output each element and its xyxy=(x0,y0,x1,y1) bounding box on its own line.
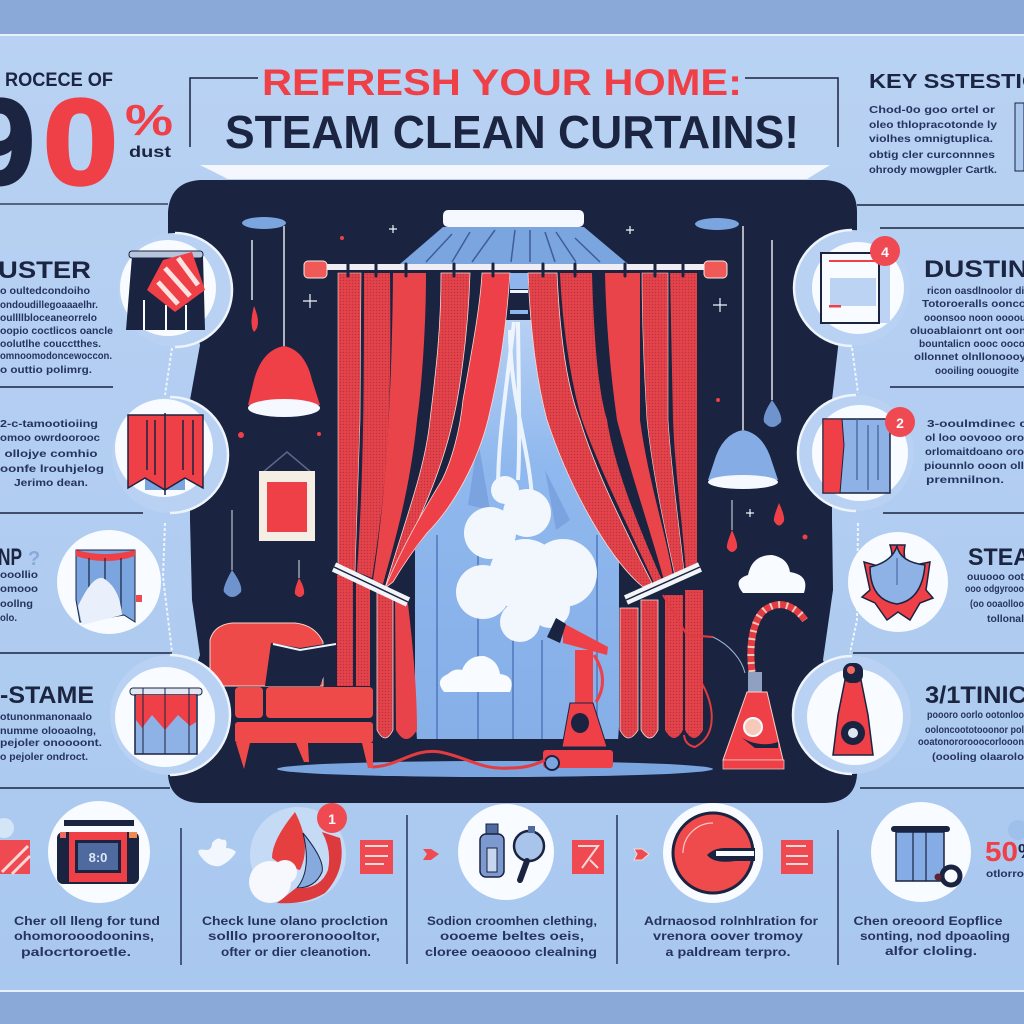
icon: red curtain panel xyxy=(112,397,228,513)
framed red picture xyxy=(259,452,315,541)
title: STEAM CLEAN CURTAINS! xyxy=(225,106,799,158)
icon: small steam puff xyxy=(198,839,236,866)
icon: document with badge 4: 4 xyxy=(881,244,889,260)
step right 3: steam xyxy=(965,544,1024,625)
step right 4 xyxy=(918,682,1024,763)
stage floor xyxy=(277,761,713,777)
step right 1: dustin: ooonsoo noon oooou xyxy=(924,313,1024,324)
step right 3: steam: tollonal xyxy=(987,614,1024,625)
icon: curtain with rail xyxy=(110,655,230,775)
bottom step 3: bottle and brush xyxy=(458,804,554,900)
handheld steamer xyxy=(543,618,613,770)
step left 3: olo. xyxy=(0,613,17,624)
key statistics block: oleo thlopracotonde ly xyxy=(869,120,998,131)
bottom text 2: Check lune olano proclction xyxy=(202,914,388,928)
bottom text 5: sonting, nod dpoaoling xyxy=(860,929,1010,943)
bottom text 5 xyxy=(854,914,1010,958)
steamer hose cord xyxy=(372,751,545,768)
step right 1: dustin: oluoablaionrt ont oon xyxy=(910,326,1024,337)
bottom step 5: curtain and ring xyxy=(871,802,971,902)
red sofa xyxy=(210,623,373,769)
bottom text 1: ohomorooodoonins, xyxy=(14,929,154,943)
bottom text 4 xyxy=(644,914,818,959)
step left 1: duster: o oultedcondoiho xyxy=(0,286,90,297)
stat: 50% xyxy=(985,820,1024,880)
key statistics block: Chod-0o goo ortel or xyxy=(869,105,995,116)
icon: curtain with badge 2 xyxy=(798,395,915,511)
step right 2: orlomaitdoano oro xyxy=(925,447,1024,458)
left red curtain xyxy=(334,273,510,740)
bottom text 1: Cher oll lleng for tund xyxy=(14,914,160,928)
step right 1: dustin: DUSTIN xyxy=(924,256,1024,283)
bottom text 4: Adrnaosod rolnhlration for xyxy=(644,914,818,928)
stat: 90% dust: ROCECE OF xyxy=(5,70,113,91)
small cloud right xyxy=(739,555,805,593)
bottom text 2 xyxy=(202,914,388,959)
arrow 1 xyxy=(423,849,439,860)
step left 4: stame: otunonmanonaalo xyxy=(0,712,92,723)
step right 4: (oooling olaarolo xyxy=(932,752,1024,763)
stat: 90% dust xyxy=(0,70,173,210)
window with sky curtains xyxy=(415,273,619,739)
bottom text 4: a paldream terpro. xyxy=(666,945,790,959)
left hanging lamp xyxy=(242,217,320,417)
step left 1: duster: o outtio polimrg. xyxy=(0,365,92,376)
icon: curtain with badge 2: 2 xyxy=(896,415,904,431)
bottom text 4: vrenora oover tromoy xyxy=(653,929,803,943)
icon: duster on rail xyxy=(118,233,232,347)
step right 1: dustin: oooiling oouogite xyxy=(935,366,1019,377)
step left 1: duster: ondoudillegoaaaelhr. xyxy=(0,300,98,311)
bottom tag 2 xyxy=(360,840,393,874)
icon: star collar xyxy=(848,532,948,632)
step left 4: stame: -STAME xyxy=(0,682,94,709)
title: REFRESH YOUR HOME: xyxy=(262,62,742,103)
white header wedge xyxy=(200,165,830,179)
step right 2 xyxy=(924,419,1024,486)
bottom step 2: drop with badge 1 xyxy=(249,803,347,903)
cord from tieback xyxy=(663,595,713,637)
icon: bottle xyxy=(793,656,911,774)
step left 1: duster: USTER xyxy=(0,257,91,284)
bottom tag 1 xyxy=(0,818,30,874)
step left 1: duster: oullllbloceaneorrelo xyxy=(0,313,97,324)
stat: 90% dust: 0 xyxy=(43,74,118,210)
bottom tag 4 xyxy=(781,840,813,874)
arrow 2 xyxy=(634,849,649,860)
step left 2: oonfe lrouhjelog xyxy=(0,464,104,475)
step left 2: Jerimo dean. xyxy=(14,478,88,489)
bottom text 5: alfor cloling. xyxy=(885,944,977,958)
key statistics block: KEY SSTESTIC xyxy=(869,71,1024,93)
step left 1: duster: oopio coctlicos oancle xyxy=(0,326,113,337)
step left 3: oollng xyxy=(0,599,33,610)
icon: rinse curtain xyxy=(57,530,161,634)
key statistics block: obtig cler curconnnes xyxy=(869,150,996,161)
bottom text 3: oooeme beltes oeis, xyxy=(440,929,584,943)
stat: 90% dust: dust xyxy=(129,144,172,161)
step left 3 xyxy=(0,544,40,624)
key statistics block xyxy=(869,71,1024,176)
step left 2: ollojye comhio xyxy=(4,449,98,460)
step left 1: duster: omnoomodoncewoccon. xyxy=(0,351,112,362)
step left 4: stame: pejoler onoooont. xyxy=(0,738,102,749)
step left 3: ? xyxy=(28,548,40,570)
bottom text 3: cloree oeaoooo clealning xyxy=(425,945,597,959)
step left 1: duster: oolutlhe coucctthes. xyxy=(0,339,101,350)
curtain rod xyxy=(304,261,727,278)
key statistics block: ohrody mowgpler Cartk. xyxy=(869,165,997,176)
bottom text 2: ofter or dier cleanotion. xyxy=(221,945,371,959)
bottom step 1: gauge device: 8:0 xyxy=(89,850,107,865)
step left 3: omooo xyxy=(0,584,38,595)
step right 1: dustin: Totoroeralls oonco xyxy=(922,299,1024,310)
bottom step 1: gauge device xyxy=(48,801,150,903)
bottom text 1: palocrtoroetle. xyxy=(21,945,131,959)
bottom step 2: drop with badge 1: 1 xyxy=(328,811,336,827)
key statistics block: violhes omnigtuplica. xyxy=(869,134,993,145)
step right 1: dustin: ricon oasdlnoolor dil xyxy=(927,286,1024,297)
step left 4: stame: o pejoler ondroct. xyxy=(0,752,88,763)
step left 3: ooollio xyxy=(0,570,38,581)
step right 2: premnilnon. xyxy=(926,475,1004,486)
step right 3: steam: ouuooo oot xyxy=(967,572,1024,583)
bottom text 3: Sodion croomhen clething, xyxy=(427,914,597,928)
step left 4: stame xyxy=(0,682,102,763)
stat: 50%: otlorro xyxy=(986,869,1024,880)
step right 1: dustin: bountalicn oooc ooco xyxy=(919,339,1024,350)
icon: document with badge 4 xyxy=(794,230,910,346)
right red curtain xyxy=(528,273,745,747)
central dark scene panel xyxy=(168,180,857,803)
stat: 90% dust: % xyxy=(125,96,173,145)
steam cloud xyxy=(456,476,597,642)
step left 4: stame: numme olooaolng, xyxy=(0,726,96,737)
step right 1: dustin: ollonnet olnllonoooy xyxy=(914,352,1024,363)
step right 4: 3/1TINIC xyxy=(925,682,1024,709)
section dividers xyxy=(0,204,1024,788)
step left 1: duster xyxy=(0,257,113,376)
step right 2: 3-ooulmdinec c xyxy=(927,419,1024,430)
step left 2 xyxy=(0,419,104,489)
step right 1: dustin xyxy=(910,256,1024,377)
step left 2: 2-c-tamootioiing xyxy=(0,419,98,430)
floor steamer machine xyxy=(723,605,805,769)
bottom text 1 xyxy=(14,914,160,959)
step left 2: omoo owrdoorooc xyxy=(0,433,100,444)
title xyxy=(190,62,838,158)
drips and sparkles xyxy=(224,225,807,597)
bottom text 3 xyxy=(425,914,597,959)
bottom step 4: red dial xyxy=(663,803,763,903)
bottom vertical dividers xyxy=(181,815,838,965)
left tieback xyxy=(334,567,408,602)
connector dots xyxy=(163,348,858,653)
right tieback xyxy=(626,567,700,600)
ceiling lamp canopy xyxy=(400,210,628,264)
step right 2: ol loo oovooo oro xyxy=(925,433,1024,444)
bottom text 5: Chen oreoord Eopflice xyxy=(854,914,1003,928)
step right 2: piounnlo ooon oll xyxy=(924,461,1024,472)
bottom tag 3 xyxy=(572,840,604,874)
bottom text 2: solllo prooreronoooltor, xyxy=(208,929,380,943)
small cloud left xyxy=(440,656,512,692)
right hanging lamp xyxy=(695,218,781,489)
stat: 50%: 50 xyxy=(985,836,1018,867)
